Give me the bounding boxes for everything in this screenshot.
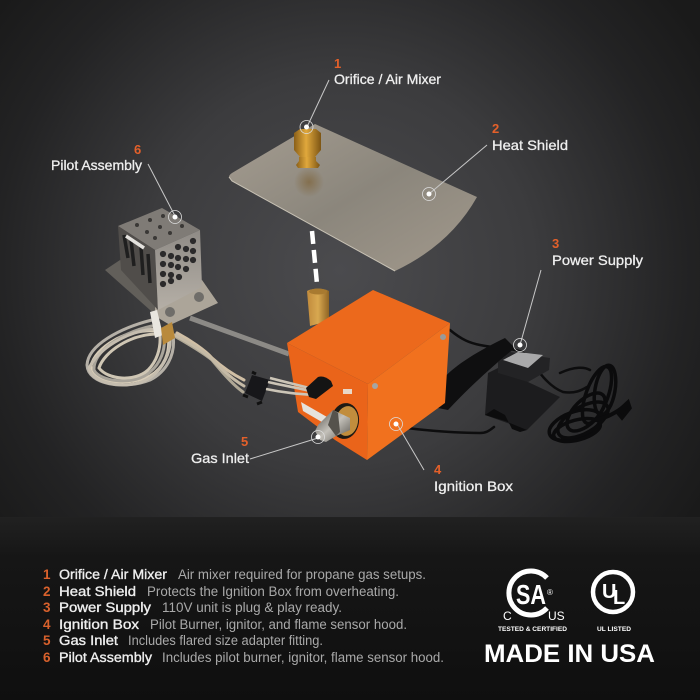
UL logo — [593, 572, 633, 633]
igniter tube — [150, 310, 163, 338]
label 5: 5 — [241, 434, 248, 449]
CSA logo: C — [503, 609, 512, 623]
legend row 5: Includes flared size adapter fitting. — [128, 633, 323, 648]
legend row 5: 5 — [43, 633, 51, 648]
grille holes — [160, 238, 196, 287]
CSA logo: TESTED & CERTIFIED — [498, 626, 567, 633]
marker 4 — [390, 418, 402, 430]
legend row 4: Ignition Box — [59, 617, 139, 632]
legend row 1: Air mixer required for propane gas setups. — [178, 567, 426, 582]
label 1: Orifice / Air Mixer — [334, 71, 441, 87]
small label — [343, 389, 352, 394]
pilot assembly — [105, 208, 218, 345]
legend row 5: Gas Inlet — [59, 633, 118, 648]
legend row 1: Orifice / Air Mixer — [59, 567, 168, 582]
coiled plug cord — [545, 363, 630, 446]
CSA logo: US — [548, 609, 565, 623]
brass coupling — [307, 288, 329, 326]
heat shield — [229, 124, 477, 271]
legend row 3: Power Supply — [59, 600, 151, 615]
legend row 2: Protects the Ignition Box from overheating. — [147, 584, 399, 599]
legend row 3: 110V unit is plug & play ready. — [162, 600, 342, 615]
label 2: Heat Shield — [492, 137, 568, 153]
cord bundle — [438, 338, 515, 410]
legend row 6: Includes pilot burner, ignitor, flame sensor hood. — [162, 650, 444, 665]
marker 3 — [514, 338, 526, 352]
right face — [155, 230, 202, 310]
label 2: 2 — [492, 121, 499, 136]
legend row 6 — [43, 650, 444, 665]
marker 2 — [422, 188, 436, 200]
orifice air mixer fitting — [294, 129, 321, 168]
base plate — [105, 260, 170, 318]
made in USA: MADE IN USA — [484, 640, 655, 668]
legend row 1: 1 — [43, 567, 51, 582]
gas tube — [190, 318, 289, 354]
legend list — [43, 567, 444, 665]
label 5 — [191, 434, 249, 466]
wire bundle loop — [87, 320, 244, 392]
brass flange — [329, 401, 361, 441]
warning label — [301, 402, 327, 425]
label 3: 3 — [552, 236, 559, 251]
left face — [118, 226, 158, 310]
label 3 — [552, 236, 643, 268]
legend row 4: 4 — [43, 617, 51, 632]
label 5: Gas Inlet — [191, 450, 249, 466]
label 3: Power Supply — [552, 252, 643, 268]
UL logo: L — [613, 587, 625, 609]
legend row 1 — [43, 567, 426, 582]
wire grommet — [306, 376, 333, 399]
UL logo: UL LISTED — [597, 626, 631, 633]
wire connector — [243, 372, 270, 404]
marker 1 — [300, 120, 313, 134]
legend row 6: Pilot Assembly — [59, 650, 152, 665]
label 1: 1 — [334, 56, 341, 71]
legend row 4 — [43, 617, 407, 632]
label 6: Pilot Assembly — [51, 157, 142, 173]
label 4: Ignition Box — [434, 478, 513, 494]
footer band — [0, 517, 700, 700]
power supply — [485, 352, 560, 432]
CSA logo: SA — [516, 579, 546, 610]
label 4: 4 — [434, 462, 442, 477]
label 6 — [51, 142, 142, 173]
marker 6 — [168, 210, 182, 224]
dashed connector — [312, 231, 317, 284]
label 4 — [434, 462, 513, 494]
legend row 4: Pilot Burner, ignitor, and flame sensor hood. — [150, 617, 407, 632]
legend row 2: 2 — [43, 584, 51, 599]
CSA logo — [498, 571, 567, 633]
CSA logo: ® — [547, 588, 553, 597]
legend row 2: Heat Shield — [59, 584, 136, 599]
screws — [440, 334, 446, 340]
UL logo: U — [602, 581, 616, 603]
ignition box — [266, 290, 450, 460]
leader lines — [148, 80, 541, 470]
legend row 6: 6 — [43, 650, 51, 665]
black cords — [407, 330, 590, 433]
label 1 — [334, 56, 441, 87]
label 2 — [492, 121, 568, 153]
bolts — [165, 307, 175, 317]
top holes — [135, 214, 184, 240]
legend row 5 — [43, 633, 323, 648]
top face — [118, 208, 200, 250]
gas inlet fitting — [315, 410, 350, 442]
marker 5 — [312, 430, 324, 444]
legend row 3 — [43, 600, 342, 615]
label 6: 6 — [134, 142, 141, 157]
box wires — [266, 378, 314, 395]
legend row 3: 3 — [43, 600, 51, 615]
